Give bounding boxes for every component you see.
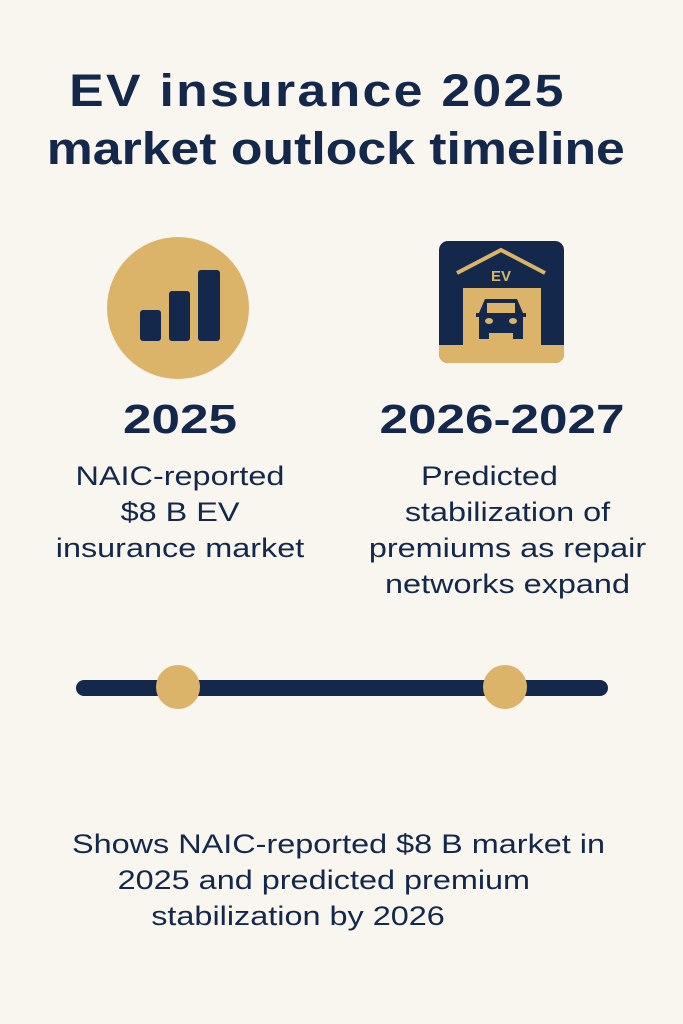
text: 2025 description: insurance market: [56, 533, 304, 563]
timeline: [76, 665, 608, 709]
caption: [72, 829, 605, 931]
caption: stabilization by 2026: [151, 901, 445, 931]
icon: bar chart circle: [107, 237, 249, 379]
icon: EV garage: [439, 241, 564, 363]
marker 2025: [156, 665, 200, 709]
icon: EV garage: EV: [491, 268, 511, 285]
marker 2026: [483, 665, 527, 709]
title: [47, 65, 625, 174]
text: 2026 description: networks expand: [385, 569, 630, 599]
text: 2025 description: [56, 461, 304, 563]
year 2025: 2025: [123, 396, 237, 442]
title: market outlock timeline: [47, 123, 625, 174]
caption: Shows NAIC-reported $8 B market in: [72, 829, 605, 859]
text: 2025 description: NAIC-reported: [76, 461, 284, 491]
text: 2026 description: [369, 461, 646, 599]
text: 2026 description: stabilization of: [405, 497, 610, 527]
text: 2025 description: $8 B EV: [121, 497, 239, 527]
text: 2026 description: premiums as repair: [369, 533, 646, 563]
caption: 2025 and predicted premium: [118, 865, 530, 895]
title: EV insurance 2025: [69, 65, 566, 116]
year 2026-2027: 2026-2027: [379, 396, 625, 442]
text: 2026 description: Predicted: [421, 461, 558, 491]
